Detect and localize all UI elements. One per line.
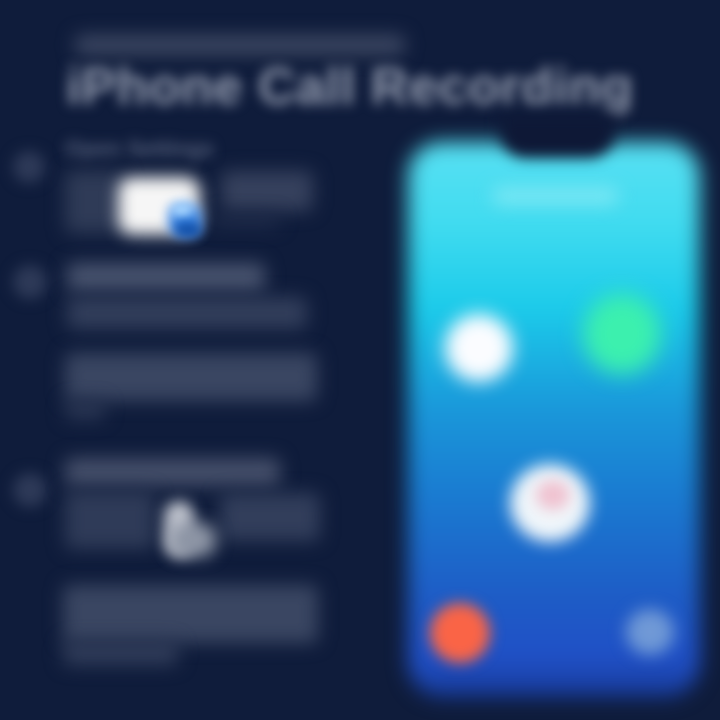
bullet 2	[13, 265, 47, 299]
step 2 text	[67, 297, 307, 329]
step 3 heading	[65, 458, 280, 486]
icon: orange button	[430, 603, 490, 663]
title small line	[75, 35, 405, 55]
title main line: iPhone Call Recording	[66, 58, 633, 116]
icon: hand cursor	[154, 492, 226, 569]
icon: white button	[445, 314, 513, 382]
bullet 3	[13, 473, 47, 507]
panel: step 1	[10, 136, 320, 248]
icon: app card	[105, 164, 214, 248]
phone body	[408, 142, 700, 697]
bullet 1	[13, 151, 45, 183]
icon: green call button	[583, 294, 661, 374]
step 1 heading: Open Settings	[65, 136, 214, 161]
phone label	[493, 188, 618, 204]
panel: step 3	[10, 450, 326, 671]
icon: blue button	[626, 609, 674, 655]
step 2 heading	[67, 263, 265, 291]
step 3 text	[65, 491, 155, 549]
panel: step 2	[10, 254, 324, 423]
phone	[392, 110, 716, 710]
step 1 text	[65, 171, 125, 233]
icon: record button	[498, 452, 602, 554]
phone notch	[500, 116, 615, 158]
title	[60, 27, 638, 122]
